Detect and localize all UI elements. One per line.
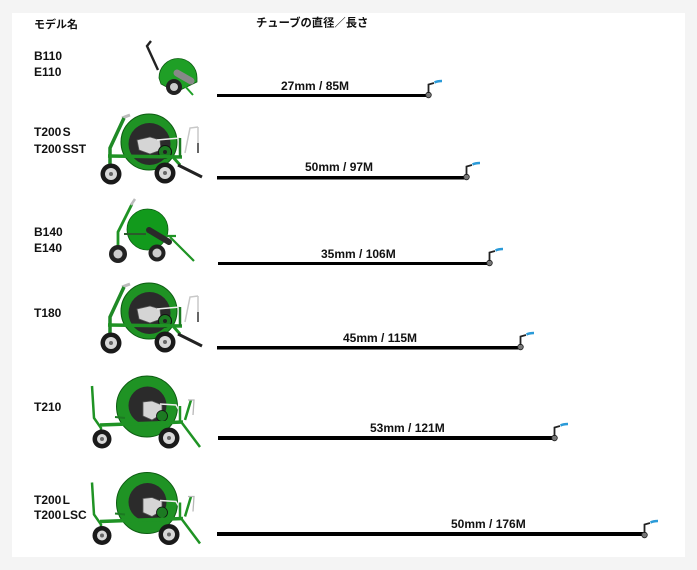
hose label: 53mm / 121M: [370, 421, 445, 435]
model labels: B140 E140: E140: [34, 241, 62, 255]
model label: T210: T210: [34, 400, 62, 414]
hose: 50mm / 97M: [217, 176, 466, 180]
machine: T200S reel irrigator: [100, 114, 202, 184]
hose: 53mm / 121M: [218, 436, 553, 440]
nozzle: [464, 163, 480, 180]
model label: T180: T180: [34, 306, 62, 320]
hose label: 45mm / 115M: [343, 331, 417, 345]
nozzle: [642, 521, 658, 538]
row: T200L / T200LSC: [34, 472, 658, 545]
hose label: 27mm / 85M: [281, 79, 349, 93]
hose label: 50mm / 97M: [305, 160, 373, 174]
hose: 35mm / 106M: [218, 262, 489, 265]
heading: model name: モデル名: [34, 17, 78, 31]
machine: B110 reel irrigator: [147, 41, 197, 95]
model labels: T200L T200LSC: T200 L: [34, 493, 70, 507]
row: B110 / E110: [34, 41, 442, 98]
heading: tube diameter and length: チューブの直径／長さ: [256, 16, 368, 30]
machine: T200L reel irrigator: [92, 472, 200, 545]
row: T200S / T200SST: [34, 114, 480, 184]
hose label: 35mm / 106M: [321, 247, 396, 261]
nozzle: [518, 333, 534, 350]
hose: 45mm / 115M: [217, 346, 520, 350]
machine: B140 reel irrigator: [109, 199, 194, 263]
model labels: T200S T200SST: T200 SST: [34, 142, 87, 156]
model labels: T200S T200SST: T200 S: [34, 125, 71, 139]
hose: 50mm / 176M: [217, 532, 644, 536]
row: T210: [34, 376, 568, 448]
nozzle: [487, 249, 503, 266]
hose: 27mm / 85M: [217, 94, 428, 97]
row: B140 / E140: [34, 199, 503, 266]
machine: T210 reel irrigator: [92, 376, 200, 448]
model labels: B140 E140: B140: [34, 225, 63, 239]
model labels: B110 E110: B110: [34, 49, 62, 63]
model labels: B110 E110: E110: [34, 65, 62, 79]
nozzle: [426, 81, 442, 98]
hose label: 50mm / 176M: [451, 517, 526, 531]
nozzle: [552, 424, 568, 441]
machine: T180 reel irrigator: [100, 283, 202, 354]
row: T180: [34, 283, 534, 354]
model labels: T200L T200LSC: T200 LSC: [34, 508, 87, 522]
